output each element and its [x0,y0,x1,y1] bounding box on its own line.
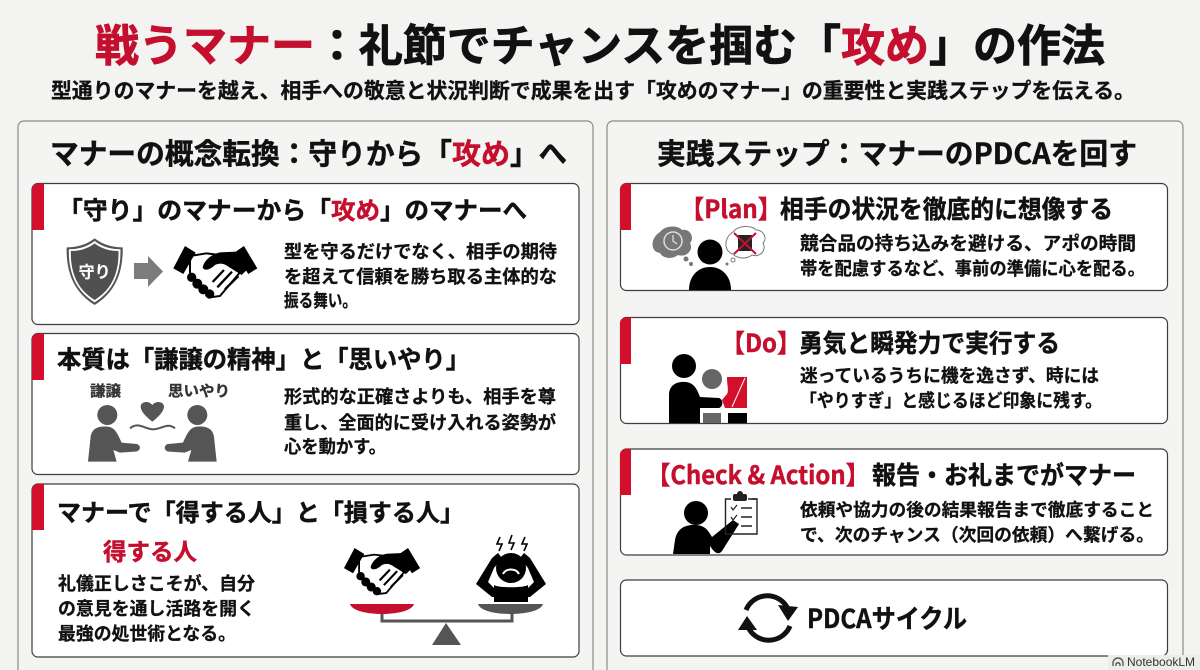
icon: handshake [173,246,257,299]
icon: balance scale [344,535,546,645]
body text: 形式的な正確さよりも、相手を尊 [284,383,556,409]
subheading: those who gain: 得する人 [103,533,197,567]
scale beam and pans [350,604,543,645]
label: humility: 謙譲 [90,380,121,401]
icon: person with checklist [673,491,757,554]
body text: の意見を通し活路を開く [58,595,255,621]
watermark: NotebookLM: NotebookLM [1127,655,1195,669]
card: check and action [620,449,1168,555]
icon: two people with heart [88,402,217,462]
card: do [620,318,1168,424]
card heading: 勇気と瞬発力で実行する [799,324,1060,360]
body text [284,238,557,313]
icon: shield: 守り [79,258,111,282]
panel heading: practical steps: 実践ステップ：マナーのPDCAを回す [657,131,1137,173]
body text: 礼儀正しさこそが、自分 [58,570,255,596]
icon: shield [67,238,123,305]
title: 」の作法 [929,10,1105,74]
body text [58,570,255,646]
card heading: 【Plan】 [680,190,782,226]
body text: 心を動かす。 [284,433,386,459]
subtitle: 型通りのマナーを越え、相手への敬意と状況判断で成果を出す「攻めのマナー」の重要性と実践ステップを伝える。 [51,75,1135,105]
body text: 「やりすぎ」と感じるほど印象に残す。 [800,387,1102,413]
card heading: 攻め [331,192,380,227]
panel heading: concept shift: 攻め [452,131,510,173]
body text: 競合品の持ち込みを避ける、アポの時間 [800,230,1136,256]
card heading [58,192,527,227]
body text: 型を守るだけでなく、相手の期待 [284,238,557,264]
card: who gains and who loses [32,484,579,657]
icon: handshake on scale [344,548,420,595]
title: 攻め [841,10,929,74]
card heading: 「守り」のマナーから「 [58,192,331,227]
body text [800,362,1102,413]
card heading: 報告・お礼までがマナー [872,456,1136,492]
panel: practical steps [607,121,1183,670]
body text: 迷っているうちに機を逸さず、時には [800,362,1099,388]
icon: cycle arrows [738,596,798,640]
card heading: 」のマナーへ [380,192,527,227]
card: PDCA cycle [620,580,1168,656]
title [95,10,1105,74]
card: defensive to offensive manners [32,184,579,324]
body text: 依頼や協力の後の結果報告まで徹底すること [800,496,1154,522]
body text: 重し、全面的に受け入れる姿勢が [284,409,556,435]
body text [284,383,556,459]
label: consideration: 思いやり [168,380,230,401]
card heading [646,456,1136,492]
body text: 振る舞い。 [284,287,357,313]
arrow [134,256,163,287]
title: 戦うマナー [95,10,315,74]
card heading: マナーで「得する人」と「損する人」 [57,493,464,528]
label: PDCA cycle: PDCAサイクル [807,599,967,636]
watermark: NotebookLM [1108,655,1200,670]
icon: person handing document [669,354,747,423]
card: essence of manners [32,334,579,474]
card heading: 本質は「謙譲の精神」と「思いやり」 [57,341,470,376]
icon: stressed person [476,535,546,602]
panel heading: concept shift: マナーの概念転換：守りから「 [50,131,452,173]
body text [800,496,1154,547]
body text: 帯を配慮するなど、事前の準備に心を配る。 [800,255,1145,281]
panel: concept shift [18,121,593,670]
title: ：礼節でチャンスを掴む [315,10,797,74]
card: plan [620,184,1168,290]
body text: で、次のチャンス（次回の依頼）へ繋げる。 [800,521,1154,547]
title: 「 [797,10,841,74]
icon: person with thought clouds [652,226,765,290]
card heading: 【Do】 [721,324,801,360]
body text: を超えて信頼を勝ち取る主体的な [284,263,557,289]
card heading: 相手の状況を徹底的に想像する [780,190,1113,226]
panel heading: concept shift: 」へ [510,131,567,173]
body text [800,230,1145,281]
card heading: 【Check & Action】 [646,456,870,492]
body text: 最強の処世術となる。 [58,620,236,646]
